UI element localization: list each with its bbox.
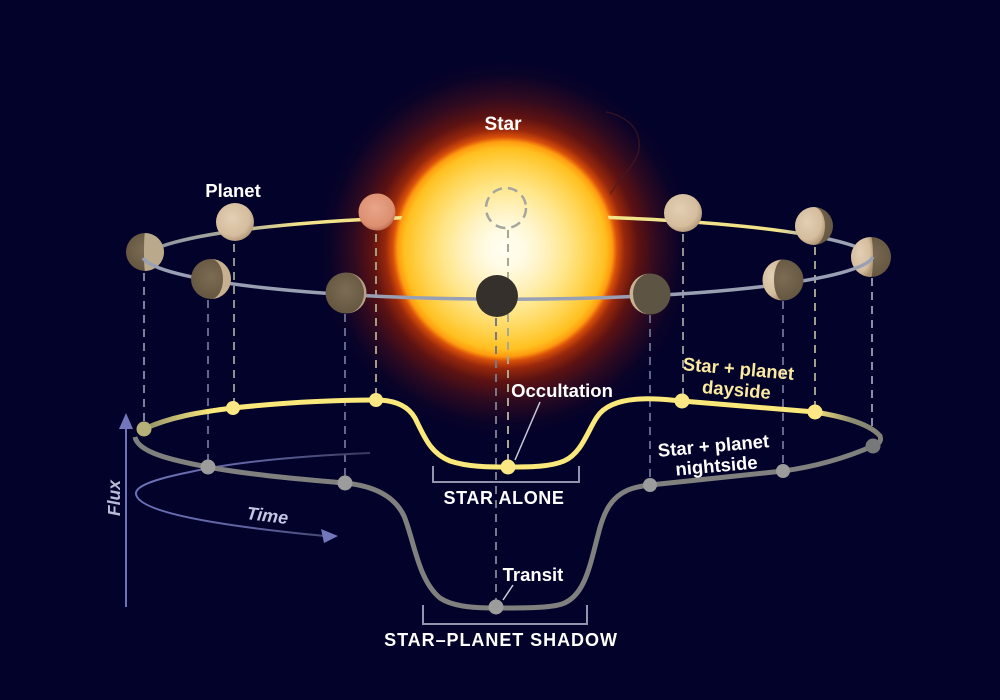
icon: planet far left — [126, 233, 164, 271]
label: transit: Transit — [503, 564, 563, 585]
curve: star plus planet nightside — [135, 437, 873, 608]
label: star: Star — [485, 114, 522, 135]
nightside curve nodes — [200, 438, 880, 614]
orbit: near side — [143, 257, 873, 299]
icon: planet far right — [851, 237, 891, 277]
icon: planet far upper left — [216, 203, 254, 241]
icon: planet in transit — [476, 275, 518, 317]
icon: star disc — [397, 141, 613, 357]
icon: planet near right — [762, 260, 804, 300]
label: star plus planet dayside: dayside — [701, 376, 772, 403]
label: planet: Planet — [205, 180, 261, 201]
label: occultation — [511, 380, 613, 460]
label: star plus planet dayside — [682, 353, 795, 403]
curve: star plus planet dayside — [144, 399, 881, 467]
label: star plus planet dayside: Star + planet — [682, 353, 795, 384]
icon: planet hidden behind star — [486, 188, 526, 228]
time axis arrow — [136, 453, 370, 543]
bracket: star alone — [433, 466, 579, 482]
icon: planet near left — [191, 259, 231, 299]
icon: planet before occultation — [358, 194, 396, 230]
label: flux: Flux — [104, 479, 124, 516]
icon: planet near centre left — [326, 272, 366, 314]
projection lines from near-side planets — [208, 300, 783, 600]
label: star-planet shadow: STAR–PLANET SHADOW — [384, 630, 618, 650]
label: occultation: Occultation — [511, 380, 613, 401]
icon: planet near centre right — [630, 274, 670, 314]
label: time: Time — [246, 503, 289, 528]
orbit: far side — [143, 216, 873, 258]
label: star alone: STAR ALONE — [444, 488, 564, 508]
flux axis arrow — [119, 413, 133, 607]
bracket: star-planet shadow — [423, 605, 587, 624]
icon: planet far upper right — [795, 207, 833, 245]
dayside curve nodes — [136, 393, 822, 474]
label: star plus planet nightside: Star + planet — [657, 430, 770, 461]
label: transit — [503, 564, 563, 600]
icon: planet after occultation — [664, 194, 702, 232]
star glow — [315, 59, 695, 439]
label: star plus planet nightside: nightside — [675, 451, 758, 480]
projection lines from far-side planets — [144, 230, 872, 460]
label: star plus planet nightside — [657, 430, 770, 480]
